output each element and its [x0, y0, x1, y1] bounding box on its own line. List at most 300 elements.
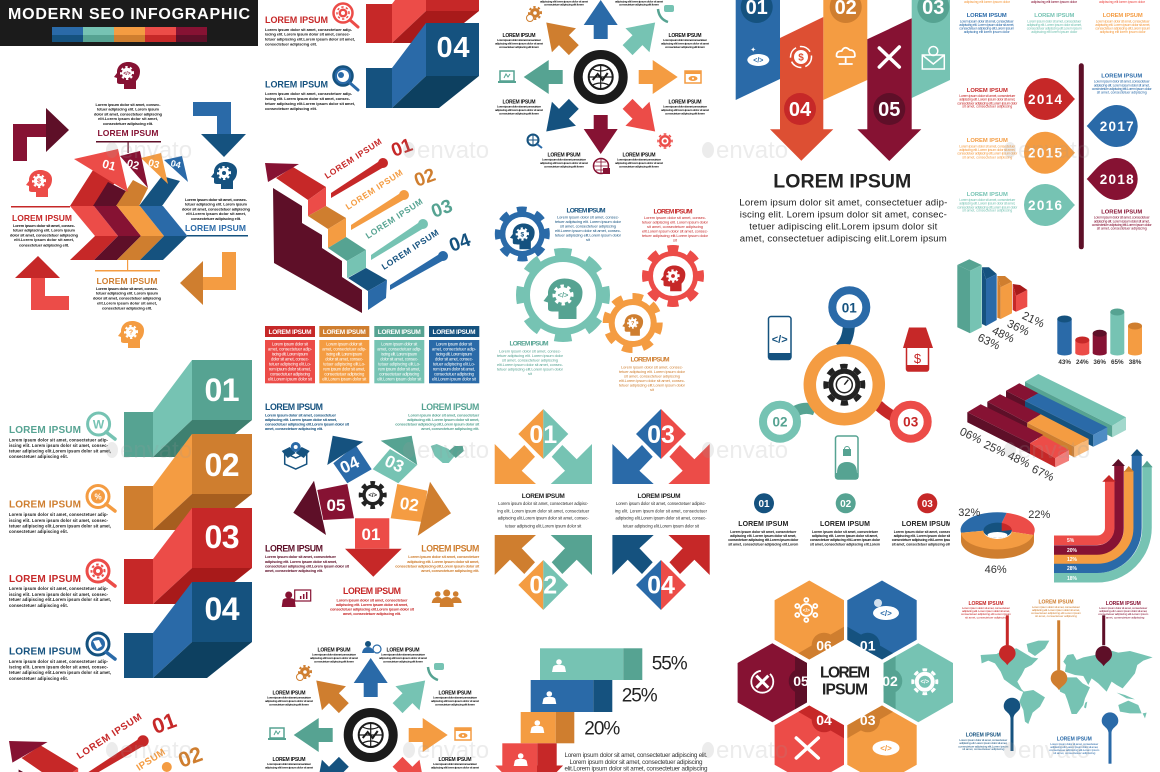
compass labels bottom: consectetuer adipiscing elit lorem	[269, 702, 309, 706]
right label: elit.Lorem ipsum dolor sit amet,	[186, 211, 246, 216]
map continents	[981, 641, 1153, 724]
magnifier label red: iscing elit. Lorem ipsum dolor sit amet, consec-	[265, 32, 351, 36]
label maroon: Lorem ipsum dolor sit amet, consectetuer	[265, 554, 336, 559]
watermarks	[106, 137, 1090, 764]
badge 01 and text: 01	[758, 499, 770, 510]
compass labels top: consectetuer adipiscing elit lorem	[665, 112, 705, 116]
head icon orange: ?	[129, 330, 133, 336]
watermarks: envato	[120, 137, 192, 164]
badge 01 and text	[728, 493, 799, 546]
label 04: Lorem ipsum dolor sit amet, consectetuer adip-	[9, 659, 109, 664]
top text fragments: adipiscing elit. Lorem ipsum dolor sit amet,	[1027, 23, 1082, 27]
label red: LOREM IPSUM	[343, 586, 401, 596]
band maroon	[1054, 465, 1119, 550]
badge 03 and text: LOREM IPSUM	[902, 521, 952, 528]
column teal	[374, 326, 424, 383]
map label red: Lorem ipsum dolor sit amet, consectetuer	[962, 606, 1010, 610]
head icon maroon	[114, 62, 140, 89]
gear text red: tetuer adipiscing elit. Lorem ipsum dolor	[642, 220, 709, 224]
percent paragraph	[564, 752, 708, 772]
label 04	[9, 633, 115, 681]
timeline captions: LOREM IPSUM	[967, 88, 1008, 94]
bar 55: 55%	[652, 653, 688, 674]
arrow set	[294, 658, 448, 772]
bar orange	[987, 394, 1089, 457]
label 01: iscing elit. Lorem ipsum dolor sit amet, consec-	[9, 443, 109, 448]
bar 20: 20%	[584, 718, 620, 739]
top label	[94, 102, 163, 153]
pin red	[999, 615, 1016, 665]
map label orange: Lorem ipsum dolor sit amet, consectetuer	[1032, 605, 1080, 609]
gear text red	[642, 208, 709, 242]
compass labels bottom	[265, 648, 479, 770]
label blue: LOREM IPSUM	[265, 402, 323, 412]
left label: LOREM IPSUM	[12, 213, 72, 223]
icon: cloud network	[837, 48, 855, 64]
gear text orange: sit amet, consectetuer adipiscing	[624, 374, 680, 378]
icon: people group	[432, 590, 462, 607]
pin maroon	[1095, 615, 1112, 666]
band labels: 20%	[1067, 548, 1078, 554]
map label blue: LOREM IPSUM	[1057, 736, 1092, 742]
band labels: 5%	[1067, 538, 1075, 544]
gear text teal: sit amet, consectetuer adipiscing	[502, 358, 558, 362]
hex 06: 06	[816, 638, 832, 654]
connector 03	[878, 405, 896, 418]
hex 03	[847, 705, 917, 772]
panel: chevron arrows	[10, 62, 251, 348]
donut labels: 32%	[958, 507, 981, 519]
column teal: iscing elit. Lorem ipsum	[381, 352, 418, 356]
compass labels top: adipiscing elit lorem ipsum dolor sit amet	[661, 42, 709, 46]
watermarks: envato	[120, 437, 192, 464]
compass labels top: consectetuer adipiscing elit lorem	[499, 45, 539, 49]
top text fragments: adipiscing elit lorem ipsum dolor	[1031, 0, 1078, 4]
gear orange: ?	[631, 321, 635, 327]
magnifier label red: tetuer adipiscing elit.Lorem ipsum dolor sit amet,	[265, 36, 355, 42]
map label maroon: sit amet, consectetuer adipiscing	[1102, 616, 1145, 620]
icon: phone code	[768, 316, 791, 360]
pin 2014: 2014	[1028, 92, 1062, 107]
magnifier label red: Lorem ipsum dolor sit amet, consectetuer adip-	[265, 27, 353, 32]
column red	[265, 326, 315, 383]
band orange	[1054, 471, 1129, 559]
bottom label	[93, 260, 162, 310]
watermarks: envato	[716, 437, 788, 464]
band red	[1054, 481, 1110, 540]
centre label: IPSUM	[822, 681, 868, 698]
compass labels bottom: consectetuer adipiscing elit lorem	[435, 702, 475, 706]
watermarks: envato	[417, 437, 489, 464]
badge 01 and text: adipiscing elit. Lorem ipsum dolor sit amet,	[730, 534, 796, 538]
watermarks: envato	[1018, 737, 1090, 764]
donut labels: 22%	[1028, 509, 1051, 521]
compass labels bottom: LOREM IPSUM	[272, 757, 306, 763]
timeline captions: consectetuer adipiscing elit.Lorem ipsum dolor	[957, 101, 1018, 105]
compass labels bottom: LOREM IPSUM	[318, 648, 350, 654]
magnifier label blue: Lorem ipsum dolor sit amet, consectetuer adip-	[265, 91, 353, 96]
map label red: consectetuer adipiscing elit.Lorem ipsum	[961, 612, 1011, 616]
top text fragments: Lorem ipsum dolor sit amet, consectetuer	[1027, 20, 1082, 24]
icon: phone shop	[903, 328, 933, 371]
top text fragments	[959, 0, 1150, 34]
top label: dolor sit amet, consectetuer adipiscing	[94, 112, 163, 116]
badge 02 and text	[810, 493, 881, 546]
bottom label: Lorem ipsum dolor sit amet, consec-	[96, 286, 159, 291]
label 02: Lorem ipsum dolor sit amet, consectetuer adip-	[9, 512, 109, 517]
arrow 02: 02	[399, 494, 420, 515]
timeline captions: sit amet, consectetuer adipiscing	[1097, 227, 1147, 231]
timeline captions: Lorem ipsum dolor sit amet, consectetuer	[959, 198, 1016, 202]
right label: LOREM IPSUM	[185, 223, 246, 233]
timeline captions	[957, 74, 1152, 231]
cylinder labels: 38%	[1129, 359, 1142, 366]
top label: LOREM IPSUM	[98, 128, 158, 138]
pin blue	[1102, 712, 1118, 764]
icon: open box	[282, 442, 310, 469]
map label dark blue: LOREM IPSUM	[966, 732, 1001, 738]
block 04	[124, 582, 252, 678]
label 01	[9, 413, 115, 459]
compass labels top: consectetuer adipiscing elit lorem	[499, 112, 539, 116]
pin dark blue	[1004, 698, 1020, 751]
timeline captions: LOREM IPSUM	[967, 192, 1008, 198]
donut labels: 46%	[985, 564, 1007, 576]
map label blue: consectetuer adipiscing elit.Lorem ipsum	[1049, 748, 1100, 752]
hex 06: </>	[803, 608, 810, 614]
paragraph: amet, consectetuer adipiscing elit.Lorem ipsum	[740, 233, 947, 244]
compass labels top: adipiscing elit lorem ipsum dolor sit amet	[540, 161, 588, 165]
compass labels top: adipiscing elit lorem ipsum dolor sit amet	[495, 108, 543, 112]
badge 02 and text: adipiscing elit. Lorem ipsum dolor sit amet,	[812, 534, 878, 538]
left label: tetuer adipiscing elit. Lorem ipsum	[13, 228, 76, 232]
timeline captions: consectetuer adipiscing elit.Lorem ipsum dolor	[1092, 223, 1152, 227]
band teal	[1054, 466, 1147, 578]
right label	[182, 197, 251, 236]
ribbon blue	[736, 0, 780, 100]
compass labels top: LOREM IPSUM	[502, 33, 536, 39]
gear text blue: Lorem ipsum dolor sit amet, consec-	[557, 214, 620, 220]
watermarks: envato	[716, 737, 788, 764]
gear text orange: sit	[650, 387, 655, 392]
magnifier label blue: LOREM IPSUM	[265, 80, 328, 90]
vertical axis	[1079, 63, 1084, 249]
ribbon teal	[912, 0, 950, 98]
label teal: LOREM IPSUM	[421, 402, 479, 412]
caption right: Lorem ipsum dolor sit amet, consectetuer adipisc-	[616, 501, 707, 506]
label orange: consectetuer adipiscing elit.Lorem ipsum dolor sit	[395, 564, 480, 569]
map label red: adipiscing elit. Lorem ipsum dolor sit amet,	[962, 609, 1010, 613]
label maroon: amet, consectetuer adipiscing elit.	[265, 568, 323, 573]
timeline captions: consectetuer adipiscing elit.Lorem ipsum dolor	[1092, 87, 1152, 91]
magnifier label red	[265, 4, 358, 46]
head icon red	[26, 170, 52, 197]
gear text red: LOREM IPSUM	[654, 208, 692, 216]
diamond group 01	[495, 409, 592, 484]
compass labels top: Lorem ipsum dolor sit amet consectetuer	[663, 104, 708, 108]
compass labels top: Lorem ipsum dolor sit amet consectetuer	[663, 38, 708, 42]
top text fragments: adipiscing elit lorem ipsum dolor	[964, 30, 1010, 34]
step 03 label: LOREM IPSUM	[364, 196, 424, 241]
compass labels bottom: consectetuer adipiscing elit lorem	[314, 660, 354, 664]
label 02: iscing elit. Lorem ipsum dolor sit amet, consec-	[9, 518, 109, 523]
map label dark blue: consectetuer adipiscing elit.Lorem ipsum	[958, 744, 1009, 748]
bars	[957, 259, 1027, 333]
label red: Lorem ipsum dolor sit amet, consectetuer	[336, 598, 408, 602]
band blue	[1054, 455, 1137, 568]
chevron stack: 02	[125, 158, 140, 172]
column orange: rem ipsum dolor sit amet,	[323, 366, 365, 372]
diamond group 03: 03	[647, 421, 675, 449]
pin 2017: 2017	[1100, 119, 1134, 134]
gear text red: elit.Lorem ipsum dolor sit amet, consec-	[642, 228, 709, 234]
column teal: rem ipsum dolor sit amet,	[378, 366, 420, 372]
gear text blue	[555, 208, 622, 242]
map label orange	[1031, 600, 1081, 618]
right label: consectetuer adipiscing elit.	[191, 216, 241, 221]
magnifier label blue: consectetuer adipiscing elit.	[265, 106, 317, 111]
map label dark blue: Lorem ipsum dolor sit amet, consectetuer	[959, 738, 1007, 742]
timeline captions: adipiscing elit. Lorem ipsum dolor sit amet,	[959, 202, 1015, 206]
label blue: consectetuer adipiscing elit.Lorem ipsum dolor sit	[265, 422, 350, 427]
map label red: sit amet, consectetuer adipiscing	[965, 616, 1007, 620]
gear text red: sit amet, consectetuer adipiscing	[647, 224, 703, 229]
bottom label: dolor sit amet, consectetuer adipiscing	[93, 296, 162, 300]
magnifier label blue: iscing elit. Lorem ipsum dolor sit amet, consec-	[265, 96, 351, 101]
compass labels top: LOREM IPSUM	[668, 33, 702, 39]
step 01 label	[323, 135, 416, 198]
ribbon orange	[823, 0, 867, 100]
hex 01	[847, 580, 917, 660]
bar labels: 21%	[1020, 310, 1046, 331]
pin 2018	[1087, 158, 1138, 200]
node 03: 03	[903, 415, 919, 430]
label 03: consectetuer adipiscing elit.	[9, 603, 68, 608]
watermarks: envato	[716, 137, 788, 164]
segment 46	[961, 531, 1033, 549]
timeline captions: adipiscing elit. Lorem ipsum dolor sit amet,	[959, 148, 1015, 152]
map label maroon: adipiscing elit. Lorem ipsum dolor sit amet,	[1099, 609, 1147, 613]
band labels	[1067, 538, 1078, 582]
panel: diamonds with split arrows	[495, 409, 710, 610]
icon: phone android	[836, 436, 858, 479]
column orange: LOREM IPSUM	[323, 329, 366, 336]
map label maroon: Lorem ipsum dolor sit amet, consectetuer	[1099, 606, 1147, 610]
map label maroon	[1098, 601, 1149, 620]
column orange: amet, consectetuer adip-	[322, 346, 367, 352]
label 01: Lorem ipsum dolor sit amet, consectetuer adip-	[9, 438, 109, 442]
compass labels top: consectetuer adipiscing elit lorem	[544, 164, 584, 168]
paragraph: Lorem ipsum dolor sit amet, consectetuer adip-	[739, 197, 947, 208]
watermarks: envato	[417, 137, 489, 164]
timeline captions: LOREM IPSUM	[1101, 210, 1142, 216]
map label blue: Lorem ipsum dolor sit amet, consectetuer	[1050, 742, 1098, 746]
column red: tetuer adipiscing elit.Lo-	[269, 362, 312, 366]
map label orange: consectetuer adipiscing elit.Lorem ipsum	[1031, 611, 1081, 615]
step 01 label: 01	[149, 708, 180, 739]
map label orange: LOREM IPSUM	[1038, 600, 1074, 606]
node 01	[832, 290, 866, 324]
badge 02 and text: consectetuer adipiscing elit.Lorem ipsum dolor	[810, 538, 881, 542]
compass labels top: consectetuer adipiscing elit lorem	[665, 45, 705, 49]
column blue: iscing elit. Lorem ipsum	[436, 352, 472, 356]
left label: dolor sit amet, consectetuer adipiscing	[10, 232, 79, 238]
column blue	[429, 326, 479, 383]
top text fragments: consectetuer adipiscing elit.Lorem ipsum	[1095, 26, 1150, 30]
compass labels top: consectetuer adipiscing elit lorem	[619, 2, 659, 6]
panel: isometric bars	[958, 374, 1126, 484]
colour strip	[52, 27, 207, 42]
arrow 01	[345, 518, 402, 577]
badge 02 and text: 02	[840, 499, 852, 510]
caption right: LOREM IPSUM	[638, 493, 680, 500]
number 05: 05	[878, 99, 900, 121]
cylinder labels	[1058, 359, 1142, 366]
top text fragments: Lorem ipsum dolor sit amet, consectetuer	[1096, 20, 1150, 24]
caption left: adipiscing elit.Lorem ipsum dolor sit amet, consec-	[498, 516, 589, 521]
panel: ribbons with arrows	[736, 0, 950, 244]
arrow heads	[1102, 449, 1153, 482]
stair blocks	[9, 741, 78, 772]
compass labels top: LOREM IPSUM	[622, 152, 656, 158]
gear teal: </>	[558, 291, 569, 300]
watermarks: envato	[1018, 437, 1090, 464]
donut extrusion	[961, 530, 1034, 559]
compass labels bottom: Lorem ipsum dolor sit amet consectetuer	[433, 762, 478, 766]
map label red: LOREM IPSUM	[968, 601, 1004, 607]
panel: hub with three nodes	[728, 290, 962, 550]
header banner	[0, 0, 258, 46]
top text fragments: consectetuer adipiscing elit.Lorem ipsum	[959, 26, 1014, 30]
badge 03 and text: consectetuer adipiscing elit.Lorem ipsum dolor	[892, 538, 962, 542]
map label blue	[1049, 736, 1100, 755]
gear text teal: tetuer adipiscing elit. Lorem ipsum dolor	[497, 353, 564, 358]
panel: table of four columns	[265, 326, 479, 383]
watermarks: envato	[1018, 137, 1090, 164]
compass labels top: Lorem ipsum dolor sit amet consectetuer	[497, 38, 542, 42]
paragraph: iscing elit. Lorem ipsum dolor sit amet, consec-	[740, 209, 947, 220]
label teal: amet, consectetuer adipiscing elit.	[421, 426, 479, 431]
column blue: amet, consectetuer adip-	[432, 346, 477, 352]
column teal: dolor sit amet, consec-	[380, 356, 419, 362]
bar 25	[531, 680, 658, 712]
icon: envelope	[922, 46, 944, 69]
panel: hexagons	[738, 580, 953, 772]
bottom label: LOREM IPSUM	[96, 276, 158, 286]
compass labels top: LOREM IPSUM	[668, 100, 702, 106]
label blue	[265, 402, 350, 431]
hex 03: </>	[880, 744, 892, 753]
hex 05	[738, 643, 813, 722]
label orange: adipiscing elit. Lorem ipsum dolor sit amet,	[407, 559, 479, 564]
number 04: 04	[789, 99, 812, 121]
gear text teal	[497, 340, 564, 376]
step 04 label: 04	[447, 230, 474, 257]
hex 05: 05	[793, 673, 809, 689]
hex 03: 03	[860, 712, 876, 728]
map label orange: adipiscing elit. Lorem ipsum dolor sit amet,	[1032, 608, 1080, 612]
block 02	[124, 434, 252, 530]
label maroon: LOREM IPSUM	[265, 544, 323, 554]
pin 2018: 2018	[1100, 172, 1134, 187]
gear text orange: tetuer adipiscing elit.Lorem ipsum dolor	[619, 382, 686, 388]
badge 02 and text: sit amet, consectetuer adipiscing elit.Lorem	[810, 542, 880, 546]
label red: consectetuer adipiscing elit.Lorem ipsum dolor sit	[330, 607, 415, 612]
block 03	[124, 508, 252, 604]
gear text red: tetuer adipiscing elit.Lorem ipsum dolor	[642, 233, 709, 238]
band labels: 12%	[1067, 557, 1078, 563]
bottom label: elit.Lorem ipsum dolor sit amet,	[97, 300, 157, 306]
gear text orange	[619, 356, 686, 392]
step 01 label: 01	[389, 135, 416, 162]
bottom label: tetuer adipiscing elit. Lorem ipsum	[96, 290, 159, 296]
magnifier label red: LOREM IPSUM	[265, 15, 328, 25]
timeline captions: Lorem ipsum dolor sit amet, consectetuer	[959, 94, 1016, 98]
step 03 label	[364, 196, 456, 260]
band labels: 28%	[1067, 566, 1078, 572]
arrow red	[770, 17, 833, 161]
label 03: iscing elit. Lorem ipsum dolor sit amet, consec-	[9, 592, 109, 597]
node 02	[763, 405, 797, 439]
arrow 01: 01	[362, 525, 380, 544]
compass labels bottom: LOREM IPSUM	[386, 648, 420, 654]
compass labels bottom: adipiscing elit lorem ipsum dolor sit amet	[310, 656, 358, 660]
gear text orange: LOREM IPSUM	[630, 356, 670, 364]
bar 25: 25%	[622, 686, 658, 707]
timeline captions: Lorem ipsum dolor sit amet, consectetuer	[1094, 80, 1150, 84]
column orange: consectetuer adipiscing	[324, 372, 365, 376]
icon: presenter	[282, 590, 311, 607]
elbow arrow maroon	[13, 108, 69, 161]
pin 2015	[1024, 132, 1075, 174]
compass labels bottom: Lorem ipsum dolor sit amet consectetuer	[433, 696, 478, 700]
compass labels bottom: consectetuer adipiscing elit lorem	[383, 660, 423, 664]
hex 01: 01	[860, 638, 876, 654]
segment 32	[961, 512, 1007, 533]
caption right: ing elit. Lorem ipsum dolor sit amet, consectetuer	[615, 508, 708, 514]
top text fragments: adipiscing elit lorem ipsum dolor	[964, 0, 1011, 4]
pin 2016	[1024, 184, 1075, 226]
compass labels bottom: Lorem ipsum dolor sit amet consectetuer	[267, 696, 312, 700]
arrow 05	[293, 481, 354, 535]
paragraph	[739, 197, 947, 244]
left label: elit.Lorem ipsum dolor sit amet,	[14, 237, 74, 242]
bar labels: 63%	[976, 332, 1002, 353]
column blue: consectetuer adipiscing	[434, 372, 475, 376]
column red: Lorem ipsum dolor sit	[272, 342, 309, 346]
icon: handshake	[431, 444, 464, 463]
timeline captions: LOREM IPSUM	[967, 138, 1008, 144]
caption left: LOREM IPSUM	[522, 493, 565, 500]
hex 02: </>	[920, 680, 930, 686]
label 02: %	[94, 492, 102, 502]
centre gear: </>	[368, 493, 378, 499]
label orange	[395, 544, 480, 573]
block 04	[366, 23, 479, 108]
label 01: LOREM IPSUM	[9, 425, 81, 436]
block 01	[124, 360, 252, 457]
badge 01 and text: LOREM IPSUM	[738, 521, 788, 528]
connector 01	[840, 322, 849, 348]
timeline captions: Lorem ipsum dolor sit amet, consectetuer	[1094, 216, 1150, 220]
left label: Lorem ipsum dolor sit amet, consec-	[13, 223, 76, 228]
label teal: Lorem ipsum dolor sit amet, consectetuer	[408, 412, 480, 418]
caption right: tetuer adipiscing elit.Lorem ipsum dolor sit	[623, 524, 700, 528]
chevron stack: 04	[170, 158, 182, 170]
watermarks: envato	[417, 737, 489, 764]
map label dark blue: adipiscing elit. Lorem ipsum dolor sit amet,	[959, 741, 1007, 745]
compass labels bottom: adipiscing elit lorem ipsum dolor sit amet	[431, 699, 479, 703]
